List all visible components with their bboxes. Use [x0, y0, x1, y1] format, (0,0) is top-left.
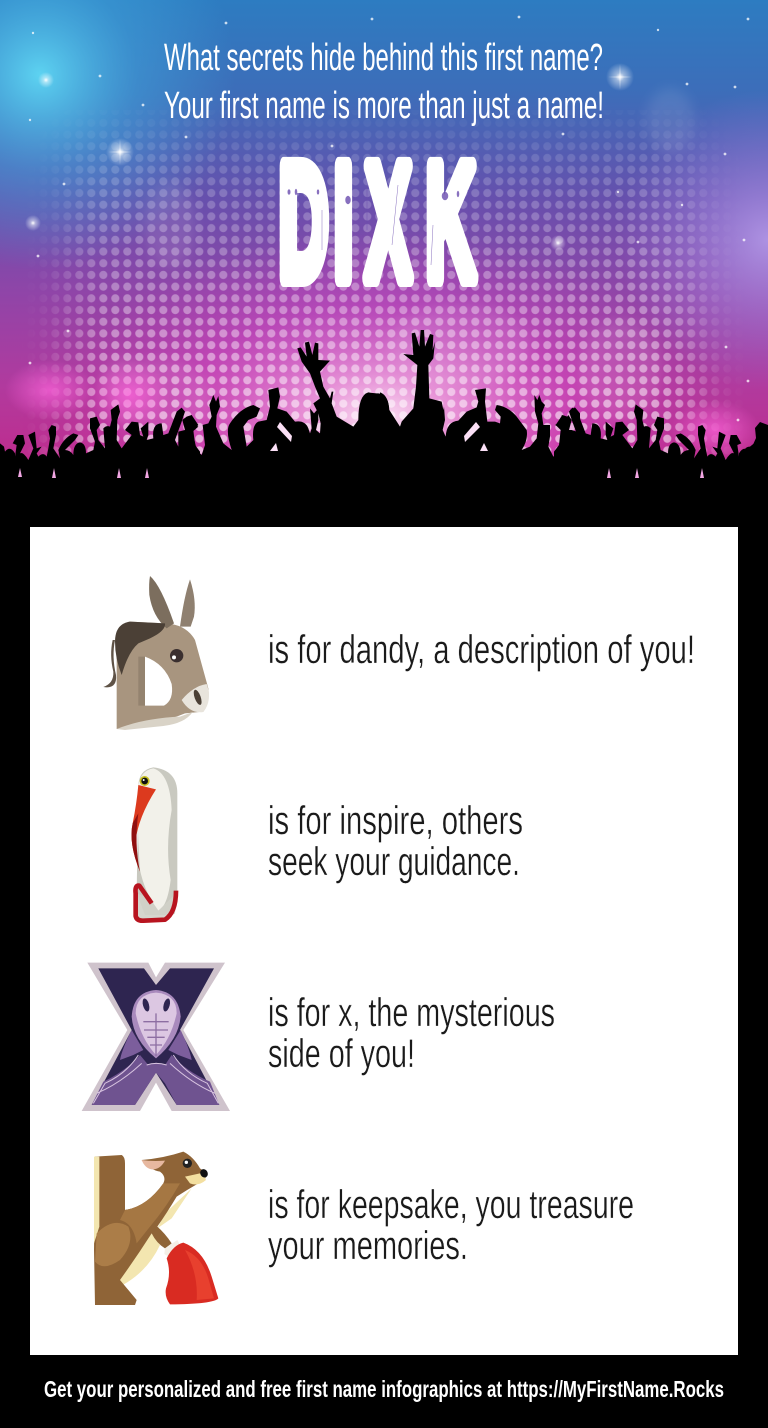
- text: X lines: [268, 991, 555, 1076]
- concert stage backdrop: [0, 0, 768, 500]
- I line 1: is for inspire, others: [268, 799, 523, 843]
- crowd silhouette: [0, 330, 768, 530]
- white content panel: [30, 527, 738, 1355]
- icon: donkey letter D: [103, 576, 209, 730]
- X line 2: side of you!: [268, 1032, 415, 1076]
- grunge specks on name: [288, 185, 470, 265]
- crowd far left: [0, 404, 200, 485]
- icon: fish letter X: [82, 963, 230, 1111]
- K line 1: is for keepsake, you treasure: [268, 1183, 634, 1227]
- X line 1: is for x, the mysterious: [268, 991, 555, 1035]
- solid black stage floor: [0, 468, 768, 530]
- text: I lines: [268, 799, 523, 884]
- crowd centre left with raised hand: [190, 342, 390, 470]
- crowd right edge figures: [742, 422, 768, 470]
- crowd far right: [554, 404, 754, 485]
- headline text: [164, 37, 604, 127]
- icon: stork letter I: [131, 767, 177, 921]
- sparkles and stars: [25, 16, 749, 421]
- pink spot lights: [5, 360, 760, 460]
- name title: DIXK: [279, 132, 475, 313]
- crowd centre right with raised hand: [380, 330, 580, 470]
- bokeh lights: [103, 88, 694, 440]
- dotted light wall: [40, 124, 730, 460]
- I line 2: seek your guidance.: [268, 840, 520, 884]
- light gaps between figures: [18, 422, 704, 478]
- text: K lines: [268, 1183, 634, 1268]
- K line 2: your memories.: [268, 1224, 468, 1268]
- icon: kangaroo letter K: [94, 1152, 218, 1305]
